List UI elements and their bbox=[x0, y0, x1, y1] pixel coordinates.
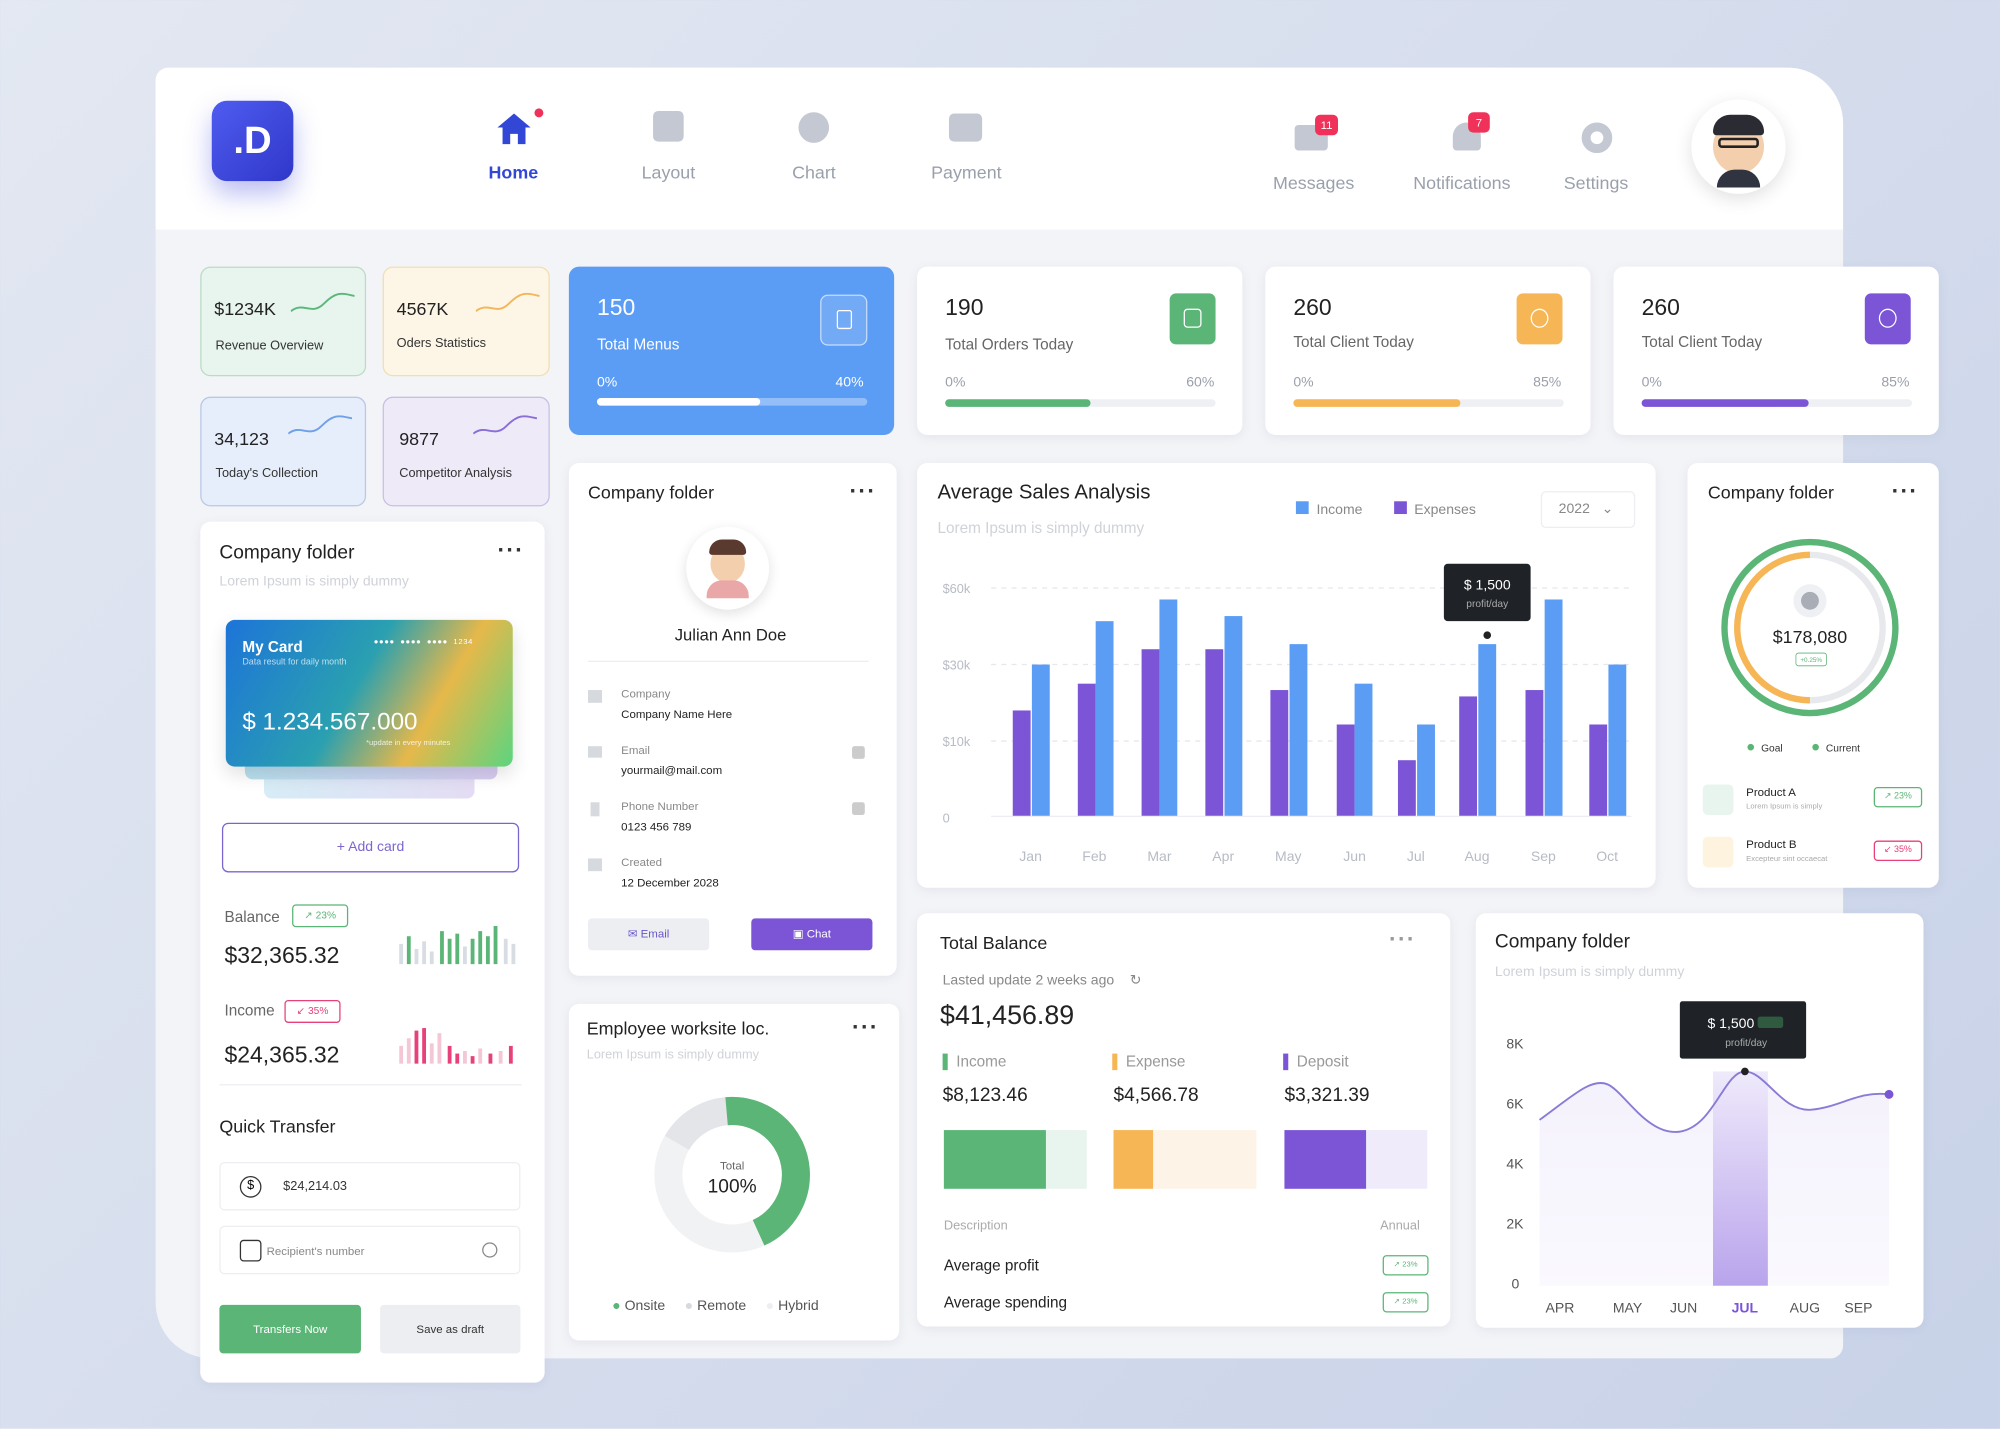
notifications: 7 bbox=[1476, 116, 1482, 129]
panel: right company folder goal: ↙ 35% bbox=[1884, 846, 1912, 855]
credit card: Data result for daily month bbox=[242, 658, 347, 667]
stat: total orders: 190 bbox=[945, 295, 983, 320]
stat: total orders: 60% bbox=[1186, 375, 1214, 390]
stat: client 1: 260 bbox=[1293, 295, 1332, 320]
line chart: profit/day bbox=[1725, 1038, 1768, 1049]
panel: employee worksite: ● Onsite ● Remote ● Hybrid bbox=[612, 1298, 819, 1314]
stat: client 2: 85% bbox=[1881, 375, 1909, 390]
panel: right company folder goal: ↗ 23% bbox=[1884, 792, 1912, 801]
panel: employee worksite bbox=[569, 1004, 899, 1341]
line chart: 8K bbox=[1506, 1035, 1524, 1051]
bar chart: Apr bbox=[1212, 848, 1234, 864]
credit card: $ 1.234.567.000 bbox=[242, 709, 418, 736]
stat: client 1: Total Client Today bbox=[1293, 333, 1414, 351]
nav: home: Home bbox=[489, 162, 538, 182]
mini card: revenue bbox=[200, 267, 366, 376]
panel: left company folder: $24,365.32 bbox=[224, 1042, 339, 1068]
panel: profile company folder bbox=[569, 463, 897, 976]
panel: average sales analysis: Average Sales Analysis bbox=[937, 482, 1150, 504]
donut chart: Total bbox=[720, 1161, 744, 1173]
logo bbox=[212, 101, 293, 181]
panel: right company folder goal: ··· bbox=[1892, 478, 1918, 504]
panel: profile company folder: Phone Number bbox=[621, 800, 698, 812]
notifications bbox=[1413, 112, 1511, 193]
bar chart: 0 bbox=[943, 811, 950, 826]
panel: profile company folder: 0123 456 789 bbox=[621, 820, 691, 833]
bar chart: May bbox=[1275, 848, 1302, 864]
stat: client 1 bbox=[1265, 267, 1591, 435]
panel: total balance: Description bbox=[944, 1219, 1008, 1233]
credit card bbox=[220, 620, 518, 798]
nav: layout bbox=[642, 111, 696, 182]
panel: total balance bbox=[917, 913, 1450, 1327]
donut chart bbox=[654, 1096, 810, 1252]
bar chart: profit/day bbox=[1466, 599, 1509, 610]
stat: total menus: 150 bbox=[597, 295, 635, 320]
stat: client 1: 85% bbox=[1533, 375, 1561, 390]
bar chart: Mar bbox=[1147, 848, 1172, 864]
bar chart: $30k bbox=[943, 658, 971, 673]
ring chart bbox=[1721, 538, 1899, 716]
panel: left company folder: Quick Transfer bbox=[219, 1116, 335, 1136]
mini card: competitor bbox=[383, 397, 550, 506]
panel: profile company folder: ··· bbox=[849, 478, 876, 504]
panel: total balance: ↗ 23% bbox=[1394, 1298, 1418, 1306]
line chart: JUN bbox=[1670, 1299, 1697, 1315]
bar chart: Feb bbox=[1082, 848, 1107, 864]
panel: left company folder: $32,365.32 bbox=[224, 943, 339, 968]
line chart: $ 1,500 bbox=[1707, 1015, 1754, 1031]
mini card: collection: Today's Collection bbox=[216, 467, 318, 481]
messages: Messages bbox=[1273, 172, 1354, 193]
panel: left company folder: Income bbox=[224, 1001, 275, 1019]
mini card: orders: 4567K bbox=[397, 298, 448, 319]
ring chart: $178,080 bbox=[1773, 627, 1847, 647]
nav: payment bbox=[931, 114, 1002, 182]
stat: client 2: 260 bbox=[1642, 295, 1680, 320]
mini card: competitor: Competitor Analysis bbox=[399, 467, 512, 481]
panel: left company folder: ↗ 23% bbox=[304, 909, 336, 921]
stat: total orders: 0% bbox=[945, 375, 965, 390]
nav: layout: Layout bbox=[642, 162, 695, 182]
panel: employee worksite: ··· bbox=[852, 1014, 879, 1040]
bar chart: Aug bbox=[1465, 848, 1490, 864]
bar chart: Oct bbox=[1596, 848, 1618, 864]
stat: total menus bbox=[569, 267, 894, 435]
bar chart: Jan bbox=[1019, 848, 1042, 864]
panel: line chart company folder: Company folder bbox=[1495, 931, 1630, 953]
panel: profile company folder: Company bbox=[621, 687, 670, 700]
panel: employee worksite: Employee worksite loc. bbox=[587, 1018, 769, 1038]
mini card: collection: 34,123 bbox=[214, 429, 269, 449]
bar chart: $60k bbox=[943, 581, 971, 596]
panel: left company folder: Lorem Ipsum is simply dummy bbox=[219, 574, 409, 589]
mini card: orders bbox=[383, 267, 550, 376]
line chart: 0 bbox=[1511, 1275, 1519, 1291]
add card button bbox=[222, 823, 519, 872]
panel: profile company folder: 12 December 2028 bbox=[621, 876, 719, 889]
panel: left company folder: $ bbox=[247, 1179, 254, 1193]
bar chart: Sep bbox=[1531, 848, 1556, 864]
panel: total balance: $3,321.39 bbox=[1284, 1084, 1370, 1106]
panel: right company folder goal: Product A bbox=[1746, 786, 1796, 798]
panel: total balance: Average profit bbox=[944, 1256, 1039, 1274]
panel: total balance: Annual bbox=[1380, 1219, 1420, 1233]
line chart: AUG bbox=[1790, 1299, 1820, 1315]
donut chart: 100% bbox=[708, 1177, 757, 1198]
panel: line chart company folder: Lorem Ipsum is simply dummy bbox=[1495, 964, 1684, 980]
stat: client 2 bbox=[1614, 267, 1939, 435]
panel: total balance: Deposit bbox=[1297, 1052, 1349, 1070]
panel: profile company folder: ✉ Email bbox=[628, 927, 669, 940]
stat: total menus: 40% bbox=[835, 375, 864, 390]
add card button: + Add card bbox=[337, 839, 404, 855]
bar chart: $ 1,500 bbox=[1464, 576, 1511, 592]
panel: left company folder: Save as draft bbox=[416, 1323, 484, 1335]
line chart bbox=[1506, 1001, 1894, 1315]
avatar bbox=[1691, 99, 1786, 194]
panel: total balance: Lasted update 2 weeks ago ↻ bbox=[943, 973, 1142, 989]
panel: total balance: $4,566.78 bbox=[1114, 1084, 1199, 1106]
panel: left company folder: ↙ 35% bbox=[297, 1005, 328, 1017]
line chart: 6K bbox=[1506, 1095, 1524, 1111]
main panel bbox=[156, 68, 1843, 1358]
panel: line chart company folder bbox=[1476, 913, 1923, 1328]
bar chart: Jul bbox=[1407, 848, 1425, 864]
nav: chart bbox=[792, 112, 836, 182]
balance bars bbox=[399, 926, 516, 964]
stat: total menus: 0% bbox=[597, 375, 617, 390]
line chart: MAY bbox=[1613, 1299, 1643, 1315]
credit card: My Card bbox=[242, 638, 303, 656]
bar chart bbox=[942, 564, 1632, 864]
nav: chart: Chart bbox=[792, 162, 836, 182]
mini card: collection bbox=[200, 397, 366, 506]
panel: employee worksite: Lorem Ipsum is simply dummy bbox=[587, 1048, 759, 1062]
panel: average sales analysis: Lorem Ipsum is simply dummy bbox=[937, 519, 1144, 537]
notifications: Notifications bbox=[1413, 172, 1511, 193]
panel: right company folder goal: ● Goal ● Current bbox=[1746, 737, 1860, 755]
panel: average sales analysis: 2022 ⌄ bbox=[1559, 501, 1613, 517]
panel: right company folder goal: Product B bbox=[1746, 838, 1797, 851]
panel: total balance: Expense bbox=[1126, 1052, 1185, 1070]
panel: right company folder goal: Excepteur sint occaecat bbox=[1746, 856, 1827, 864]
mini card: revenue: Revenue Overview bbox=[216, 339, 323, 353]
stat: client 2: Total Client Today bbox=[1642, 333, 1762, 351]
panel: left company folder: ··· bbox=[497, 537, 524, 562]
legend: Income Expenses bbox=[1316, 503, 1476, 518]
logo: .D bbox=[233, 120, 272, 162]
panel: profile company folder: yourmail@mail.com bbox=[621, 764, 722, 777]
panel: profile company folder: Created bbox=[621, 856, 662, 869]
mini card: orders: Oders Statistics bbox=[397, 337, 486, 351]
panel: left company folder: Recipient's number bbox=[267, 1245, 364, 1258]
line chart: JUL bbox=[1732, 1299, 1759, 1315]
mini card: competitor: 9877 bbox=[399, 429, 439, 449]
settings: Settings bbox=[1564, 172, 1628, 193]
panel: right company folder goal: Company folder bbox=[1708, 482, 1834, 503]
bar chart: Jun bbox=[1343, 848, 1366, 864]
panel: total balance: $8,123.46 bbox=[943, 1084, 1028, 1106]
ring chart: +0.25% bbox=[1800, 657, 1822, 664]
panel: profile company folder: Julian Ann Doe bbox=[675, 625, 786, 644]
panel: profile company folder: Company folder bbox=[588, 482, 714, 503]
panel: profile company folder: ▣ Chat bbox=[793, 927, 831, 940]
panel: left company folder: Transfers Now bbox=[253, 1323, 327, 1335]
panel: total balance: ··· bbox=[1389, 926, 1416, 952]
credit card: *update in every minutes bbox=[366, 740, 450, 747]
panel: average sales analysis bbox=[917, 463, 1656, 888]
stat: total orders: Total Orders Today bbox=[945, 335, 1073, 353]
settings bbox=[1564, 122, 1628, 193]
income bars bbox=[399, 1028, 513, 1064]
messages: 11 bbox=[1321, 119, 1332, 131]
panel: total balance: $41,456.89 bbox=[940, 1001, 1074, 1031]
credit card: ●●●● ●●●● ●●●● 1234 bbox=[374, 639, 473, 647]
panel: left company folder: Balance bbox=[224, 908, 280, 926]
panel: right company folder goal bbox=[1687, 463, 1939, 888]
nav: home bbox=[489, 108, 544, 182]
panel: left company folder: Company folder bbox=[219, 542, 354, 564]
line chart: 2K bbox=[1506, 1215, 1524, 1231]
panel: total balance: Average spending bbox=[944, 1293, 1067, 1311]
messages bbox=[1273, 114, 1354, 193]
stat: total orders bbox=[917, 267, 1242, 435]
stat: client 1: 0% bbox=[1293, 375, 1314, 390]
nav: payment: Payment bbox=[931, 162, 1002, 182]
line chart: 4K bbox=[1506, 1155, 1524, 1171]
panel: left company folder: $24,214.03 bbox=[283, 1180, 347, 1194]
stat: client 2: 0% bbox=[1642, 375, 1662, 390]
panel: profile company folder: Company Name Here bbox=[621, 708, 732, 721]
panel: left company folder bbox=[200, 522, 545, 1383]
panel: profile company folder: Email bbox=[621, 744, 650, 756]
bar chart: $10k bbox=[943, 734, 971, 749]
panel: total balance: ↗ 23% bbox=[1394, 1261, 1418, 1269]
mini card: revenue: $1234K bbox=[214, 298, 276, 319]
panel: right company folder goal: Lorem Ipsum is simply bbox=[1746, 804, 1822, 811]
panel: total balance: Income bbox=[956, 1052, 1006, 1070]
line chart: APR bbox=[1546, 1299, 1574, 1315]
line chart: SEP bbox=[1844, 1299, 1872, 1315]
panel: total balance: Total Balance bbox=[940, 932, 1047, 953]
stat: total menus: Total Menus bbox=[597, 335, 679, 353]
